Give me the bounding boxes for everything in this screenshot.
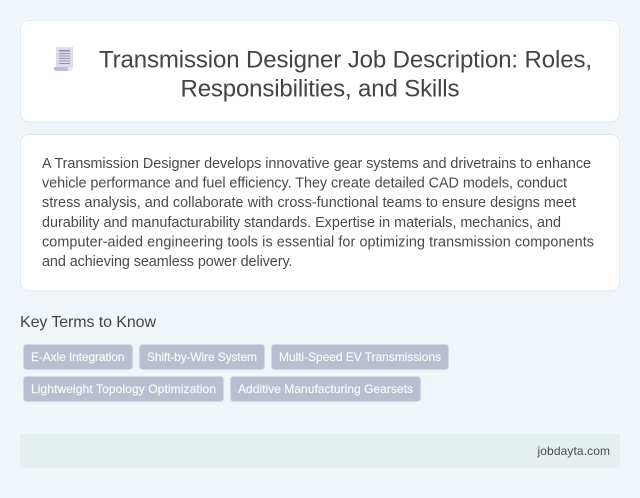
- text block: description: durability and manufacturability standards. Expertise in materials, mechanics, and: [42, 215, 561, 231]
- text block: description: computer-aided engineering tools is essential for optimizing transmission components: [42, 234, 594, 250]
- text block: description: A Transmission Designer develops innovative gear systems and drivetrains to enhance: [42, 156, 591, 172]
- tag: Lightweight Topology Optimization: Lightweight Topology Optimization: [31, 382, 216, 396]
- text block: description: stress analysis, and collaborate with cross-functional teams to ensure designs meet: [42, 195, 576, 211]
- tag: Lightweight Topology Optimization: [24, 376, 224, 402]
- tag: Additive Manufacturing Gearsets: [230, 376, 420, 402]
- title: [99, 46, 592, 102]
- text block: description: vehicle performance and fuel efficiency. They create detailed CAD models, conduct: [42, 176, 567, 192]
- icon: document scroll: [54, 47, 74, 71]
- title: Transmission Designer Job Description: Roles,: [99, 46, 592, 74]
- title: Responsibilities, and Skills: [180, 76, 460, 102]
- tag: E-Axle Integration: E-Axle Integration: [31, 350, 124, 364]
- panel: title header: [20, 20, 620, 122]
- footer: source: jobdayta.com: [536, 444, 610, 458]
- tag: E-Axle Integration: [24, 344, 132, 370]
- text block: description: and achieving seamless power delivery.: [42, 254, 292, 270]
- heading: key terms: Key Terms to Know: [20, 314, 156, 331]
- tag: Shift-by-Wire System: [140, 344, 264, 370]
- tag: Additive Manufacturing Gearsets: Additive Manufacturing Gearsets: [238, 382, 413, 396]
- panel: description: [20, 134, 620, 291]
- tag: Multi-Speed EV Transmissions: Multi-Speed EV Transmissions: [279, 350, 441, 364]
- tag: Shift-by-Wire System: Shift-by-Wire System: [147, 350, 257, 364]
- tag: Multi-Speed EV Transmissions: [272, 344, 448, 370]
- footer bar: [20, 434, 620, 468]
- text block: description: [42, 156, 594, 270]
